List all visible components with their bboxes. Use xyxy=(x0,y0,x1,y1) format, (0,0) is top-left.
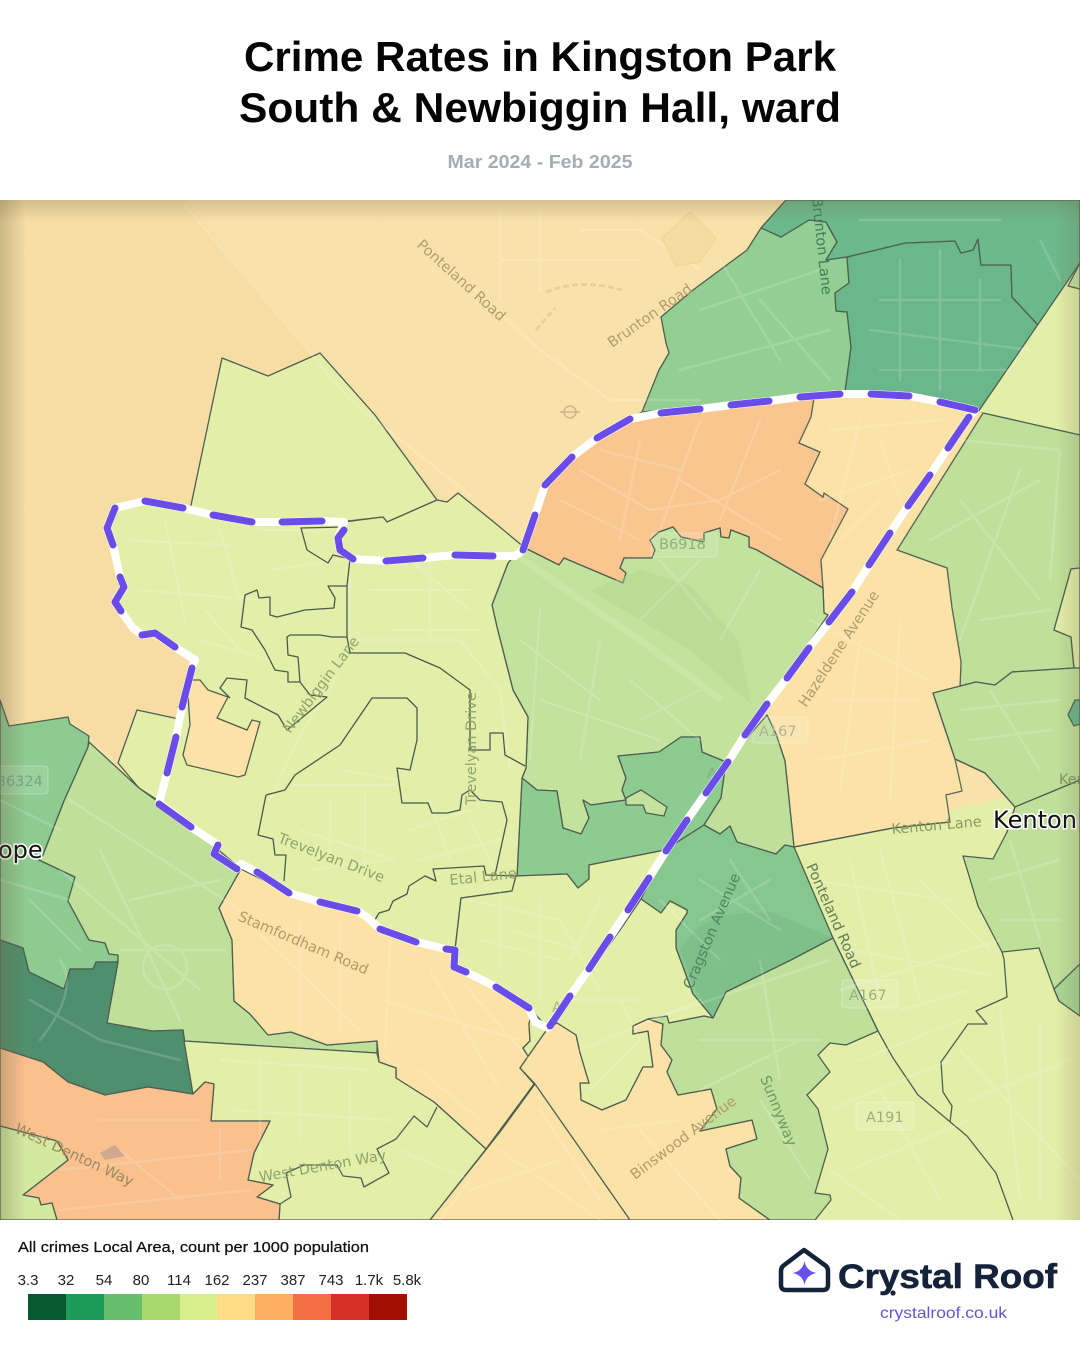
subtle central green patch xyxy=(606,571,749,702)
logo xyxy=(781,1250,1058,1322)
road labels: West Denton Way xyxy=(12,1121,136,1190)
ward interior boundaries xyxy=(220,527,525,920)
place labels: Kenton xyxy=(993,806,1077,834)
road labels: Kenton Lane xyxy=(891,814,982,838)
road labels: A xyxy=(707,766,717,782)
railway and buildings xyxy=(100,212,716,1160)
road labels: Hazeldene Avenue xyxy=(796,588,883,710)
panel: south-west districts xyxy=(0,700,548,1220)
road labels: A167 xyxy=(759,724,797,740)
icon: house with star xyxy=(781,1250,828,1290)
road shields xyxy=(0,533,914,1130)
main road strip xyxy=(520,558,722,700)
legend values: 114 xyxy=(167,1272,191,1289)
legend values xyxy=(18,1272,422,1289)
road labels: Brunton Lane xyxy=(808,197,834,296)
panel: south-east base area xyxy=(795,798,1080,1220)
place labels xyxy=(0,806,1077,864)
title: Crime Rates in Kingston Park xyxy=(244,33,837,80)
choropleth map xyxy=(0,197,1080,1220)
panel: north green districts xyxy=(642,200,1080,693)
legend values: 32 xyxy=(58,1272,74,1289)
panel: ward light green area xyxy=(107,353,665,1028)
road labels: Etal Lane xyxy=(449,866,518,889)
panel: western sand area xyxy=(0,200,525,763)
road labels: A xyxy=(552,1000,562,1016)
title xyxy=(239,33,841,131)
legend values: 162 xyxy=(204,1272,230,1289)
legend values: 1.7k xyxy=(355,1272,384,1289)
panel: orange district xyxy=(525,398,848,588)
map edge shading xyxy=(0,200,1080,1220)
website url: crystalroof.co.uk xyxy=(880,1305,1008,1322)
legend values: 237 xyxy=(242,1272,268,1289)
logo wordmark: Crystal Roof xyxy=(838,1258,1058,1296)
road labels: A191 xyxy=(866,1110,904,1126)
legend values: 387 xyxy=(280,1272,306,1289)
road labels: Trevelyan Drive xyxy=(275,830,387,886)
ward boundary xyxy=(107,394,975,1028)
legend title: All crimes Local Area, count per 1000 population xyxy=(18,1239,369,1256)
road labels: A167 xyxy=(849,988,887,1004)
panel: Hazeldene sand district xyxy=(814,550,960,842)
logo key tail xyxy=(890,1290,896,1296)
road labels: Trevelyan Drive xyxy=(464,692,480,806)
road labels: Newbiggin Lane xyxy=(280,634,363,736)
street network xyxy=(0,205,1080,1220)
legend xyxy=(18,1239,422,1320)
panel: south-east districts xyxy=(430,668,1080,1220)
panel: sand enclave in ward xyxy=(183,680,260,777)
road labels: Brunton Road xyxy=(605,281,695,351)
road labels: Ponteland Road xyxy=(413,237,508,325)
legend values: 743 xyxy=(318,1272,344,1289)
road labels: Sunnyway xyxy=(756,1074,799,1149)
panel: sand district north-east xyxy=(800,400,983,589)
legend values: 80 xyxy=(133,1272,149,1289)
road labels: Binswood Avenue xyxy=(628,1093,740,1183)
subtle darker Cragston patch xyxy=(682,912,824,1012)
road labels: Ponteland Road xyxy=(802,861,863,971)
Hazeldene district east edge xyxy=(897,413,983,687)
date range subtitle: Mar 2024 - Feb 2025 xyxy=(448,152,632,172)
legend values: 54 xyxy=(96,1272,112,1289)
NE sand district edge xyxy=(799,398,848,615)
legend colour scale xyxy=(28,1294,407,1320)
road labels: West Denton Way xyxy=(258,1148,388,1186)
legend values: 5.8k xyxy=(393,1272,422,1289)
Hazeldene district south edge xyxy=(767,693,962,847)
road labels: Stamfordham Road xyxy=(235,909,371,978)
title: South & Newbiggin Hall, ward xyxy=(239,84,841,131)
road labels: B6918 xyxy=(659,537,706,553)
legend values: 3.3 xyxy=(18,1272,38,1289)
panel: central green districts xyxy=(492,527,833,1018)
road labels: Cragston Avenue xyxy=(681,871,744,992)
road labels xyxy=(0,197,1080,1190)
